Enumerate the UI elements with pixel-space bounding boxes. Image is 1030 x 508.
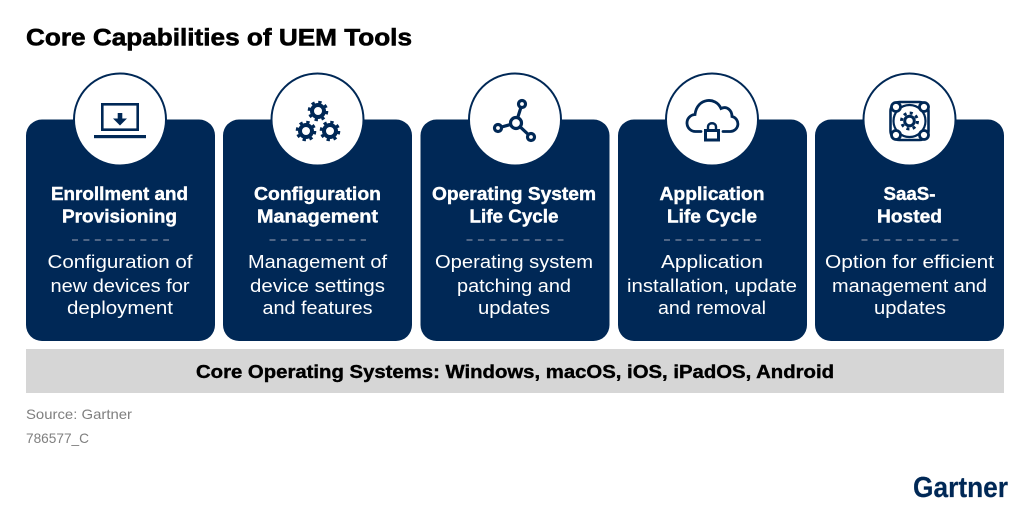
description: Operating system	[435, 252, 593, 272]
panel: Application Life Cycle	[618, 74, 807, 341]
description	[435, 252, 593, 318]
description	[248, 252, 388, 318]
description: Configuration of	[48, 252, 194, 272]
panel: Operating System Life Cycle	[420, 74, 610, 341]
description: and features	[262, 298, 372, 318]
description: Management of	[248, 252, 388, 272]
panel: Enrollment and Provisioning	[26, 74, 215, 341]
heading	[877, 184, 942, 226]
heading	[660, 184, 764, 226]
logo: Gartner: Gartner	[913, 472, 1008, 504]
heading	[51, 184, 188, 226]
icon: node network	[469, 74, 561, 166]
heading	[254, 184, 381, 226]
description: new devices for	[50, 276, 190, 296]
panel: SaaS-Hosted	[815, 74, 1004, 341]
heading: Provisioning	[62, 206, 177, 226]
icon: gear in frame	[864, 74, 956, 166]
footer bar: core operating systems: Core Operating Systems: Windows, macOS, iOS, iPadOS, Android	[196, 362, 834, 382]
heading: SaaS-	[884, 184, 936, 204]
heading	[432, 184, 596, 226]
panel: Configuration Management	[223, 74, 412, 341]
source: Source: Gartner	[26, 406, 132, 422]
description: device settings	[250, 276, 385, 296]
heading: Life Cycle	[470, 206, 558, 226]
document id: 786577_C	[26, 430, 89, 446]
heading: Hosted	[877, 206, 942, 226]
description: deployment	[67, 298, 173, 318]
heading: Operating System	[432, 184, 596, 204]
heading: Life Cycle	[667, 206, 757, 226]
icon: gears	[272, 74, 364, 166]
description	[825, 252, 994, 318]
heading: Configuration	[254, 184, 381, 204]
icon: cloud lock	[666, 74, 758, 166]
description: Application	[661, 252, 763, 272]
description: installation, update	[627, 276, 797, 296]
heading: Application	[660, 184, 764, 204]
heading: Management	[257, 206, 378, 226]
title: Core Capabilities of UEM Tools	[26, 24, 412, 52]
description: management and	[832, 276, 987, 296]
heading: Enrollment and	[51, 184, 188, 204]
description: Option for efficient	[825, 252, 994, 272]
description: updates	[874, 298, 946, 318]
description	[627, 252, 797, 318]
description: and removal	[658, 298, 766, 318]
icon: laptop download	[74, 74, 166, 166]
description: updates	[478, 298, 550, 318]
description	[48, 252, 194, 318]
footer bar: core operating systems	[26, 349, 1004, 393]
description: patching and	[457, 276, 571, 296]
